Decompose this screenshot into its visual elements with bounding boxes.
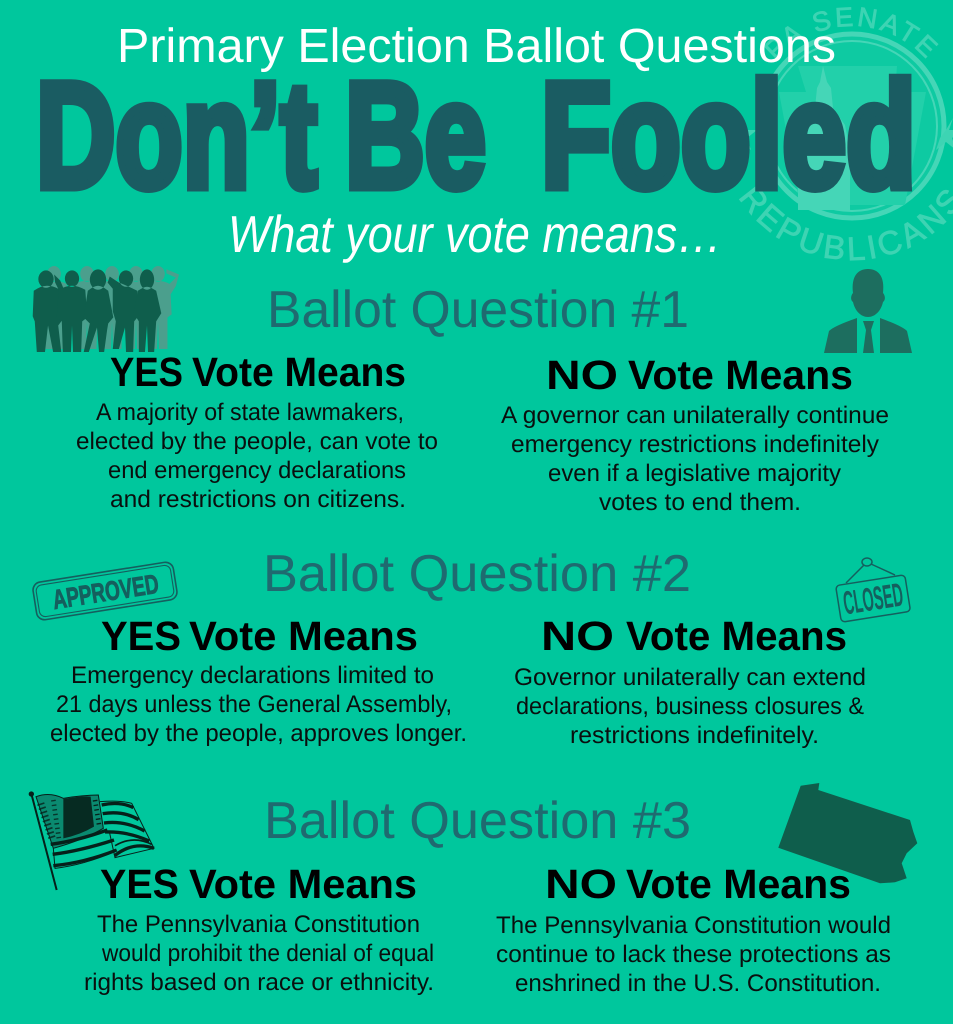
column: yes vote 2 bbox=[50, 613, 467, 747]
column: yes vote 3 bbox=[84, 861, 434, 996]
text: yes vote explanation: 21 days unless the General Assembly, bbox=[56, 691, 452, 718]
text: no vote explanation: Governor unilaterally can extend bbox=[514, 664, 866, 691]
section: ballot question 1 bbox=[33, 266, 912, 516]
heading: no vote means: NO bbox=[541, 613, 614, 659]
text: no vote explanation: emergency restrictions indefinitely bbox=[511, 431, 879, 458]
text: yes vote explanation: and restrictions on citizens. bbox=[110, 486, 406, 513]
heading: no vote means: Vote Means bbox=[626, 861, 851, 907]
icon: closed sign bbox=[836, 558, 911, 622]
text: no vote explanation: enshrined in the U.S. Constitution. bbox=[515, 970, 881, 997]
watermark: PA Senate Republicans seal: PA SENATE bbox=[764, 7, 938, 58]
text: yes vote explanation: Emergency declarations limited to bbox=[71, 662, 434, 689]
icon: approved stamp: APPROVED bbox=[50, 569, 161, 615]
heading: ballot question 2: Ballot Question #2 bbox=[263, 545, 691, 603]
heading: ballot question 3: Ballot Question #3 bbox=[264, 792, 691, 850]
text: no vote explanation: declarations, business closures & bbox=[516, 693, 864, 720]
icon: approved stamp bbox=[32, 561, 178, 621]
column: yes vote 1 bbox=[76, 349, 438, 513]
text: yes vote explanation: end emergency declarations bbox=[108, 457, 406, 484]
column: no vote 2 bbox=[514, 613, 866, 749]
headline: Don't Be Fooled: Be bbox=[345, 51, 486, 219]
watermark: PA Senate Republicans seal bbox=[739, 7, 953, 261]
text: yes vote explanation bbox=[84, 911, 434, 996]
heading: yes vote means: YES bbox=[110, 349, 183, 395]
headline: Don't Be Fooled: Don’t bbox=[36, 51, 317, 219]
heading: yes vote means: YES bbox=[101, 613, 181, 659]
text: no vote explanation: votes to end them. bbox=[599, 489, 801, 516]
text: yes vote explanation: would prohibit the denial of equal bbox=[101, 940, 434, 967]
text: no vote explanation: continue to lack these protections as bbox=[496, 941, 891, 968]
text: no vote explanation: The Pennsylvania Constitution would bbox=[496, 912, 891, 939]
subtitle: What your vote means: What your vote means… bbox=[228, 206, 722, 264]
text: yes vote explanation bbox=[76, 399, 438, 513]
section: ballot question 3 bbox=[29, 783, 917, 997]
text: yes vote explanation: rights based on race or ethnicity. bbox=[84, 969, 434, 996]
text: no vote explanation bbox=[496, 912, 891, 997]
heading: yes vote means: Vote Means bbox=[189, 861, 417, 907]
heading: ballot question 1: Ballot Question #1 bbox=[267, 281, 689, 339]
text: yes vote explanation: elected by the people, can vote to bbox=[76, 428, 438, 455]
text: no vote explanation bbox=[514, 664, 866, 749]
section: ballot question 2 bbox=[32, 545, 911, 749]
icon: man in suit silhouette bbox=[824, 269, 912, 353]
icon: group of people silhouettes bbox=[33, 266, 179, 352]
heading: yes vote means: Vote Means bbox=[192, 349, 406, 395]
text: no vote explanation: A governor can unilaterally continue bbox=[501, 402, 889, 429]
text: no vote explanation: restrictions indefinitely. bbox=[570, 722, 819, 749]
text: yes vote explanation: A majority of state lawmakers, bbox=[96, 399, 404, 426]
text: yes vote explanation bbox=[50, 662, 467, 747]
text: no vote explanation bbox=[501, 402, 889, 516]
heading: yes vote means: YES bbox=[100, 861, 179, 907]
column: no vote 1 bbox=[501, 352, 889, 516]
heading: no vote means: NO bbox=[545, 861, 617, 907]
title: Primary Election Ballot Questions: Primary Election Ballot Questions bbox=[117, 20, 836, 73]
text: yes vote explanation: The Pennsylvania Constitution bbox=[97, 911, 420, 938]
heading: yes vote means bbox=[110, 349, 406, 395]
text: no vote explanation: even if a legislative majority bbox=[548, 460, 841, 487]
heading: no vote means: Vote Means bbox=[626, 613, 847, 659]
icon: Pennsylvania state shape bbox=[778, 783, 917, 883]
column: no vote 3 bbox=[496, 861, 891, 997]
headline: Don't Be Fooled bbox=[36, 51, 916, 219]
text: yes vote explanation: elected by the people, approves longer. bbox=[50, 720, 467, 747]
heading: yes vote means: Vote Means bbox=[189, 613, 418, 659]
heading: no vote means: NO bbox=[546, 352, 618, 398]
icon: American flag bbox=[29, 791, 154, 890]
heading: no vote means: Vote Means bbox=[628, 352, 853, 398]
